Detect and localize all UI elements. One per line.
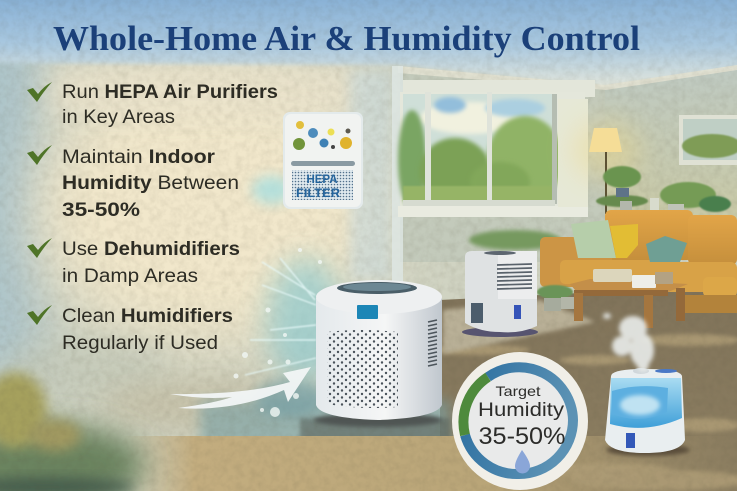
- ceiling and sky band: [0, 0, 737, 87]
- gauge ring: [463, 367, 573, 474]
- plants under window: [469, 230, 561, 250]
- gauge: target humidity: 35-50%: [478, 423, 566, 450]
- item 2: indoor humidity: 35-50%: [62, 200, 140, 221]
- back wall middle: [400, 68, 605, 262]
- humidifier: [603, 313, 690, 456]
- floor: [120, 285, 737, 491]
- item 4: clean humidifiers: Regularly if Used: [62, 333, 218, 354]
- purifier perforations: [327, 330, 398, 408]
- filter label: HEPA: [306, 174, 338, 186]
- purifier display: [357, 305, 378, 319]
- dehumidifier vent: [497, 264, 532, 289]
- air intake arrow: [170, 367, 311, 409]
- item 2: indoor humidity: Maintain Indoor: [62, 147, 216, 168]
- item 4: clean humidifiers: [27, 305, 233, 354]
- gauge droplet: [515, 450, 530, 474]
- wall painting: [679, 115, 737, 165]
- checklist: [27, 82, 278, 354]
- coffee table: [570, 269, 688, 328]
- item 2: indoor humidity: [27, 145, 239, 221]
- small potted plants: [537, 285, 574, 311]
- bottom-left foliage: [0, 372, 145, 491]
- sofa: [540, 210, 737, 313]
- filter label: FILTER: [296, 188, 341, 200]
- sofa cushions: [571, 220, 687, 262]
- HEPA filter card: [283, 112, 363, 209]
- filter label: [296, 174, 341, 200]
- item 3: dehumidifiers: [27, 238, 240, 287]
- item 4: clean humidifiers: Clean Humidifiers: [62, 306, 233, 327]
- item 1: HEPA purifiers: in Key Areas: [62, 107, 175, 128]
- window: [392, 66, 595, 286]
- title: Whole-Home Air & Humidity Control: [53, 19, 640, 58]
- dehumidifier: [462, 251, 538, 337]
- humidifier mist: [603, 313, 654, 372]
- gauge: target humidity: Humidity: [478, 400, 565, 421]
- window panes with view: [398, 94, 563, 210]
- item 3: dehumidifiers: Use Dehumidifiers: [62, 239, 240, 260]
- item 3: dehumidifiers: in Damp Areas: [62, 266, 198, 287]
- item 1: HEPA purifiers: [27, 82, 278, 128]
- item 1: HEPA purifiers: Run HEPA Air Purifiers: [62, 82, 278, 103]
- item 2: indoor humidity: Humidity Between: [62, 173, 239, 194]
- back wall right: [605, 68, 737, 250]
- floor lamp: [572, 120, 640, 214]
- books on table: [593, 269, 673, 288]
- gauge: target humidity: [452, 352, 588, 490]
- crown moulding: [398, 65, 737, 90]
- air flow glow: [234, 248, 343, 417]
- gauge text: Target: [496, 383, 541, 399]
- curtain: [558, 99, 588, 207]
- pollutant particles: [293, 121, 352, 150]
- air purifier: [314, 280, 442, 427]
- houseplants: [596, 166, 731, 213]
- teal glow behind HEPA card: [252, 176, 292, 204]
- purifier side vent: [428, 320, 437, 366]
